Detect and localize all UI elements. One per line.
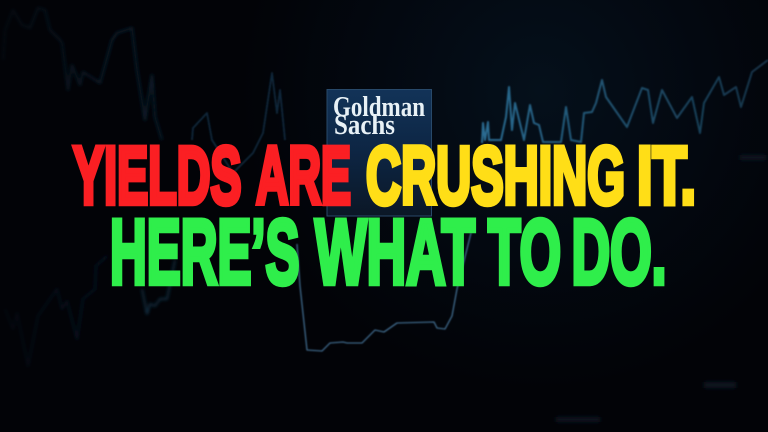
chart: faint upper-left line — [3, 8, 285, 173]
headline line 2: DO. — [572, 202, 666, 304]
headline — [73, 130, 696, 304]
headline line 1 — [73, 130, 696, 222]
headline line 1: ARE — [256, 130, 351, 222]
headline line 2: WHAT — [315, 202, 475, 304]
headline line 2 — [110, 202, 666, 304]
logo text — [333, 91, 425, 141]
logo text: Sachs — [334, 109, 395, 141]
headline line 2: TO — [488, 202, 561, 304]
chart: bright right line — [482, 60, 768, 143]
headline line 1: YIELDS — [73, 130, 242, 222]
logo text: Goldman — [333, 91, 425, 123]
chart: bright lower line — [297, 233, 471, 351]
headline line 1: IT. — [637, 130, 696, 222]
faint background labels — [556, 155, 766, 422]
headline line 2: HERE’S — [110, 202, 300, 304]
logo panel: Goldman Sachs — [327, 90, 432, 216]
chart: faint lower-left line — [5, 256, 175, 366]
